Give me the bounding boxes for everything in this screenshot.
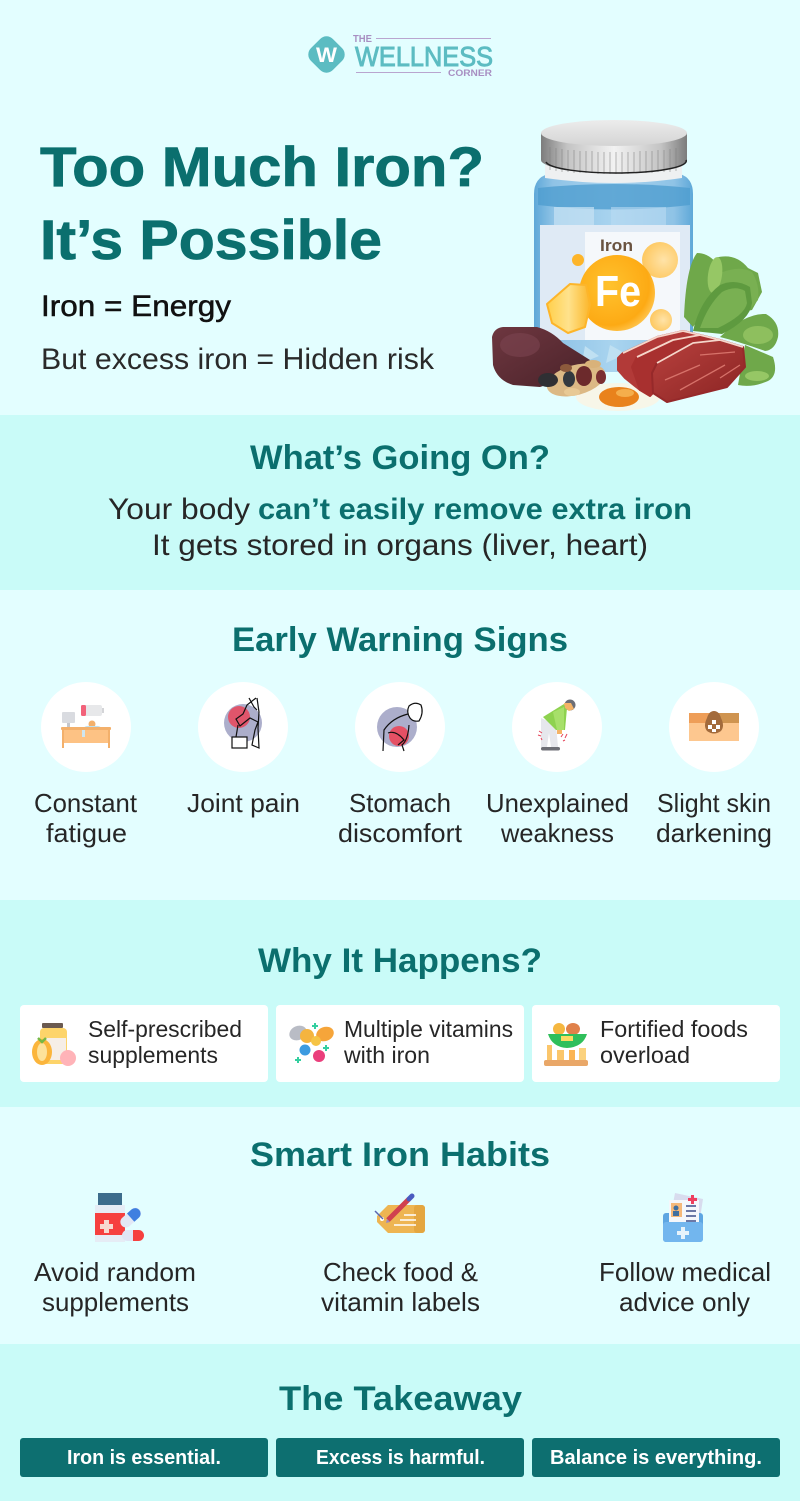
- heading: Why It Happens?: [258, 942, 542, 980]
- label: discomfort: [338, 818, 463, 848]
- section: the takeaway: [20, 1380, 780, 1477]
- label: supplements: [88, 1042, 218, 1068]
- icon: pill bottle and capsules: [95, 1193, 144, 1242]
- label: fatigue: [46, 818, 127, 848]
- logo: The Wellness Corner: WELLNESS: [355, 41, 493, 72]
- sign: constant fatigue: [34, 682, 138, 848]
- explanation text: [108, 493, 692, 562]
- section: what's going on: [108, 439, 692, 562]
- label: supplements: [42, 1287, 189, 1317]
- banner: balance is everything: [532, 1438, 780, 1477]
- label: Avoid random: [34, 1257, 196, 1287]
- panel: why it happens background: [0, 900, 800, 1107]
- habit: follow medical advice only: [599, 1193, 771, 1317]
- label: [599, 1257, 771, 1317]
- label: [343, 1016, 513, 1068]
- panel: takeaway background: [0, 1344, 800, 1501]
- label: Unexplained: [486, 788, 629, 818]
- icon: stomach pain figure: [355, 682, 445, 772]
- egg: [576, 383, 660, 411]
- label: [34, 788, 138, 848]
- title: It’s Possible: [40, 208, 382, 271]
- section: early warning signs: [34, 621, 772, 848]
- label: [486, 788, 629, 848]
- title: [40, 135, 484, 271]
- label: [338, 788, 463, 848]
- icon: medical folder: [663, 1193, 703, 1242]
- label: advice only: [619, 1287, 750, 1317]
- jar label: Iron: [600, 237, 633, 255]
- jar lid: [541, 120, 687, 174]
- explanation text: Your body: [108, 493, 250, 526]
- illustration: iron supplement jar with iron-rich foods: [492, 120, 778, 411]
- sign: unexplained weakness: [486, 682, 629, 848]
- label: Fortified foods: [600, 1016, 748, 1042]
- banner: balance is everything: Balance is everything.: [550, 1447, 762, 1469]
- icon: knee pain figure: [198, 682, 288, 772]
- card: self-prescribed supplements: [20, 1005, 268, 1082]
- title: Too Much Iron?: [40, 135, 484, 198]
- beans: [538, 358, 609, 402]
- label: Self-prescribed: [88, 1016, 242, 1042]
- sign: slight skin darkening: [656, 682, 772, 848]
- label: overload: [600, 1042, 690, 1068]
- sign: joint pain: [187, 682, 300, 818]
- spinach leaves: [684, 253, 778, 386]
- label: [656, 788, 772, 848]
- label: [34, 1257, 196, 1317]
- panel: what's going on background: [0, 415, 800, 590]
- icon: vitamin capsules: [287, 1023, 336, 1063]
- habit: avoid random supplements: [34, 1193, 196, 1317]
- label: Stomach: [349, 788, 451, 818]
- icon: label tag and pencil: [375, 1196, 425, 1233]
- subtitle text: [41, 290, 435, 376]
- card: multiple vitamins with iron: [276, 1005, 524, 1082]
- label: Follow medical: [599, 1257, 771, 1287]
- heading: What’s Going On?: [250, 439, 550, 477]
- icon: fortified foods on a shelf: [544, 1023, 588, 1066]
- label: Check food &: [323, 1257, 478, 1287]
- sign: stomach discomfort: [338, 682, 463, 848]
- label: vitamin labels: [321, 1287, 480, 1317]
- subtitle text: But excess iron = Hidden risk: [41, 343, 435, 376]
- label: weakness: [500, 818, 614, 848]
- card: fortified foods overload: [532, 1005, 780, 1082]
- section: why it happens: [20, 942, 780, 1082]
- jar label: Fe: [595, 267, 641, 316]
- banner: iron is essential: Iron is essential.: [67, 1447, 221, 1469]
- section: smart iron habits: [34, 1136, 771, 1317]
- heading: Early Warning Signs: [232, 621, 568, 659]
- logo: The Wellness Corner: W: [316, 44, 337, 67]
- label: with iron: [343, 1042, 430, 1068]
- red meat slices: [618, 331, 745, 402]
- logo: The Wellness Corner: [305, 33, 493, 79]
- label: [88, 1016, 242, 1068]
- label: Joint pain: [187, 788, 300, 818]
- label: [600, 1016, 748, 1068]
- liver: [492, 327, 590, 387]
- explanation text: can’t easily remove extra iron: [258, 493, 692, 526]
- explanation text: It gets stored in organs (liver, heart): [152, 529, 648, 562]
- heading: The Takeaway: [279, 1380, 522, 1418]
- banner: excess is harmful: [276, 1438, 524, 1477]
- jar body: [534, 165, 693, 372]
- banner: iron is essential: [20, 1438, 268, 1477]
- banner: excess is harmful: Excess is harmful.: [316, 1447, 485, 1469]
- logo: The Wellness Corner: CORNER: [448, 68, 492, 79]
- logo: The Wellness Corner: THE: [353, 34, 372, 45]
- heading: Smart Iron Habits: [250, 1136, 550, 1174]
- label: Constant: [34, 788, 138, 818]
- icon: hunched figure: [512, 682, 602, 772]
- subtitle text: Iron = Energy: [41, 290, 231, 323]
- label: Slight skin: [657, 788, 771, 818]
- jar label: [547, 237, 678, 333]
- habit: check food and vitamin labels: [321, 1196, 480, 1317]
- label: darkening: [656, 818, 772, 848]
- icon: person asleep at desk with low battery: [41, 682, 131, 772]
- icon: supplement bottle with orange: [32, 1023, 76, 1066]
- icon: skin layer with pigment: [669, 682, 759, 772]
- label: [321, 1257, 480, 1317]
- label: Multiple vitamins: [344, 1016, 513, 1042]
